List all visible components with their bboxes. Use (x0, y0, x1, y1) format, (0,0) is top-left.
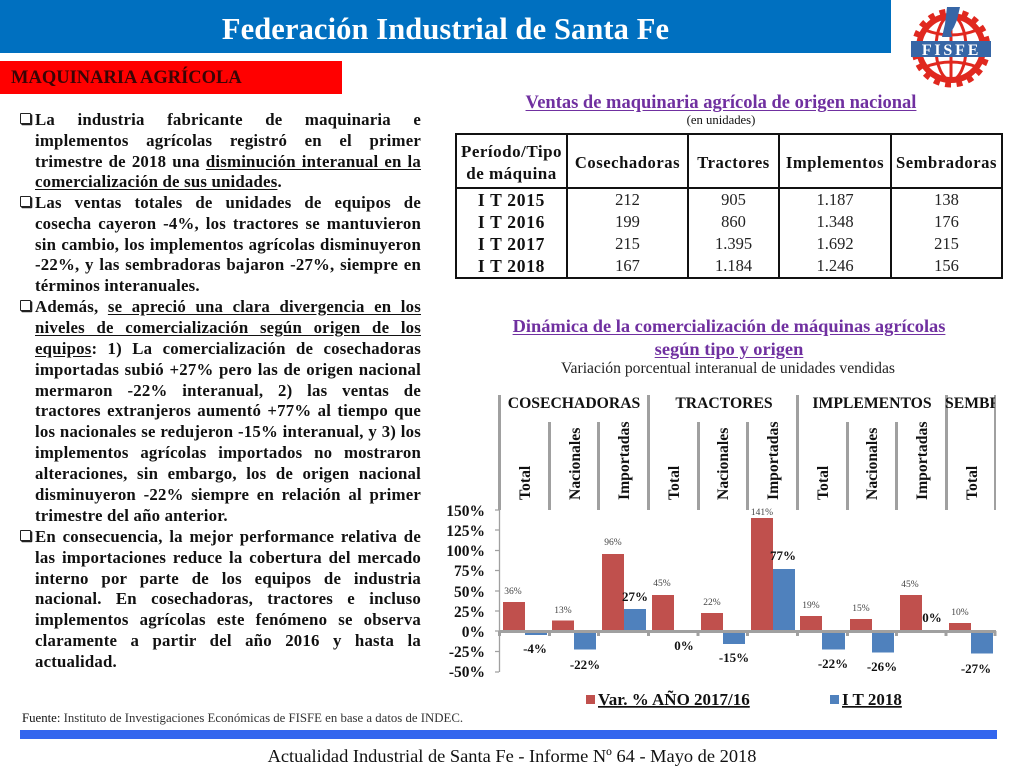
table: sales by period (455, 133, 1003, 279)
sub-category labels: Total (964, 465, 981, 500)
bar chart (446, 395, 1010, 709)
legend: Var. % AÑO 2017/16 (598, 690, 750, 709)
table: sales by period: 215 (615, 234, 640, 253)
text block: analysis bullets: Las ventas totales de unidades de equipos de (35, 193, 421, 212)
data labels: 2017/16: 36% (504, 587, 522, 597)
baseline (499, 630, 996, 633)
text block: analysis bullets: implementos agrícolas registró en el primer (35, 131, 421, 150)
table: sales by period: 215 (934, 234, 959, 253)
bars: I T 2018 (525, 569, 993, 654)
table: sales by period: 156 (934, 256, 959, 275)
sub-category labels: Nacionales (567, 428, 584, 500)
table: sales by period: 1.692 (816, 234, 854, 253)
text block: analysis bullets: implementos agrícolas este fenómeno se observa (35, 610, 421, 629)
icon: FISFE logo (911, 7, 991, 88)
table: sales by period: Implementos (786, 153, 884, 172)
table: sales by period: 199 (615, 212, 640, 231)
text block: analysis bullets: equipos: 1) La comercialización de cosechadoras (35, 339, 421, 358)
legend (586, 690, 902, 709)
table: sales by period: Tractores (697, 153, 770, 172)
category labels: COSECHADORAS (508, 395, 641, 412)
data labels: 2017/16: 45% (901, 580, 919, 590)
sub-category labels: Importadas (914, 422, 931, 500)
table: sales by period: 212 (615, 190, 640, 209)
table: sales by period: Sembradoras (896, 153, 997, 172)
y axis: 150% (446, 503, 485, 520)
sub-category labels: Total (815, 465, 832, 500)
text block: analysis bullets: -22%, y las sembradoras bajaron -27%, siempre en (35, 255, 421, 274)
data labels: 2017/16: 15% (852, 604, 870, 614)
sub-category labels: Importadas (765, 422, 782, 500)
text block: analysis bullets: importadas subió +27% pero las de origen nacional (35, 360, 421, 379)
table: sales by period: 1.348 (816, 212, 854, 231)
table: sales by period: 905 (721, 190, 746, 209)
text block: analysis bullets: implementos agrícolas importados no mostraron (35, 443, 421, 462)
data labels: I T 2018: -22% (818, 656, 848, 671)
text block: analysis bullets: interno por parte de los equipos de industria (35, 569, 421, 588)
data labels: 2017/16: 141% (751, 508, 773, 518)
text block: analysis bullets: actualidad. (35, 652, 117, 671)
y axis: 125% (446, 523, 485, 540)
text block: analysis bullets: alteraciones, sin embargo, los de origen nacional (35, 464, 421, 483)
data labels: I T 2018: 77% (770, 548, 796, 563)
footer text: Actualidad Industrial de Santa Fe - Informe Nº 64 - Mayo de 2018 (268, 746, 756, 766)
y axis: -50% (449, 664, 485, 681)
table subtitle: (en unidades) (687, 113, 755, 127)
category dividers (498, 395, 996, 510)
y axis (446, 503, 500, 681)
text block: analysis bullets: tractores extranjeros aumentó +77% al tiempo que (35, 401, 421, 420)
data labels: 2017/16: 96% (604, 538, 622, 548)
data labels: 2017/16: 45% (653, 579, 671, 589)
footer bar (20, 730, 997, 739)
data labels: 2017/16: 22% (703, 598, 721, 608)
category labels (508, 395, 1024, 412)
table: sales by period: Período/Tipo (461, 142, 562, 161)
text block: analysis bullets (20, 110, 421, 671)
chart subtitle: Variación porcentual interanual de unidades vendidas (561, 360, 895, 377)
y axis: -25% (449, 644, 485, 661)
data labels: I T 2018: -22% (570, 657, 600, 672)
section heading: Maquinaria agrícola: MAQUINARIA AGRÍCOLA (11, 68, 242, 88)
table heading: Ventas de maquinaria agrícola de origen nacional (526, 93, 916, 113)
text block: analysis bullets: nacional. En cosechadoras, tractores e incluso (35, 589, 421, 608)
data labels: I T 2018: -4% (523, 641, 547, 656)
sub-category labels: Nacionales (864, 428, 881, 500)
table: sales by period: de máquina (466, 164, 557, 183)
table: sales by period: 1.187 (816, 190, 854, 209)
data labels: I T 2018 (523, 548, 991, 676)
bars: Var. % año 2017/16 (503, 518, 971, 631)
text block: analysis bullets: trimestre de 2018 una disminución interanual en la (35, 152, 421, 171)
title: Federación Industrial de Santa Fe (222, 12, 669, 46)
data labels: 2017/16: 13% (554, 606, 572, 616)
text block: analysis bullets: los nacionales se redujeron -15% interanual, y 3) los (35, 422, 421, 441)
table: sales by period: Cosechadoras (575, 153, 680, 172)
text block: analysis bullets: mermaron -22% interanual, 2) las ventas de (35, 381, 421, 400)
table: sales by period: I T 2015 (478, 190, 545, 210)
header banner (0, 0, 891, 53)
data labels: 2017/16: 10% (951, 608, 969, 618)
table: sales by period: I T 2016 (478, 212, 545, 232)
category labels: IMPLEMENTOS (812, 395, 932, 412)
data labels: 2017/16: 19% (802, 601, 820, 611)
source note: Fuente: Instituto de Investigaciones Económicas de FISFE en base a datos de INDEC. (22, 711, 463, 725)
text block: analysis bullets: las importaciones reduce la cobertura del mercado (35, 548, 421, 567)
y axis: 100% (446, 543, 485, 560)
data labels: 2017/16 (504, 508, 969, 618)
data labels: I T 2018: -26% (867, 659, 897, 674)
table: sales by period: 1.395 (715, 234, 752, 253)
text block: analysis bullets: niveles de comercialización según origen de los (35, 318, 421, 337)
table: sales by period: 138 (934, 190, 959, 209)
text block: analysis bullets: sin cambio, los implementos agrícolas disminuyeron (35, 235, 421, 254)
sub-category labels: Total (666, 465, 683, 500)
text block: analysis bullets: Además, se apreció una clara divergencia en los (35, 297, 421, 316)
data labels: I T 2018: -27% (961, 661, 991, 676)
text block: analysis bullets: La industria fabricante de maquinaria e (35, 110, 421, 129)
data labels: I T 2018: -15% (719, 650, 749, 665)
icon: FISFE logo: FISFE (922, 42, 981, 59)
text block: analysis bullets: trimestre del año anterior. (35, 506, 228, 525)
table: sales by period: I T 2018 (478, 256, 545, 276)
text block: analysis bullets: disminuyeron -22% siempre en relación al primer (35, 485, 421, 504)
data labels: I T 2018: 0% (922, 610, 942, 625)
text block: analysis bullets: cosecha cayeron -4%, los tractores se mantuvieron (35, 214, 421, 233)
y axis: 25% (454, 604, 485, 621)
data labels: I T 2018: 27% (622, 589, 648, 604)
table: sales by period: 176 (934, 212, 959, 231)
table: sales by period: 1.246 (816, 256, 854, 275)
chart heading: Dinámica de la comercialización de máquinas agrícolas (513, 316, 945, 336)
text block: analysis bullets: comercialización de sus unidades. (35, 172, 282, 191)
section heading: Maquinaria agrícola (0, 61, 342, 94)
data labels: I T 2018: 0% (674, 638, 694, 653)
sub-category labels: Total (517, 465, 534, 500)
text block: analysis bullets: En consecuencia, la mejor performance relativa de (35, 527, 421, 546)
y axis: 50% (454, 584, 485, 601)
text block: analysis bullets: términos interanuales. (35, 276, 200, 295)
table: sales by period: I T 2017 (478, 234, 545, 254)
table: sales by period: 1.184 (715, 256, 752, 275)
legend: I T 2018 (842, 690, 902, 709)
text block: analysis bullets: claramente a partir del año 2016 y hasta la (35, 631, 421, 650)
sub-category labels: Nacionales (715, 428, 732, 500)
sub-category labels (517, 422, 981, 500)
y axis: 0% (462, 624, 485, 641)
table: sales by period: 167 (615, 256, 640, 275)
table: sales by period: 860 (721, 212, 746, 231)
category labels: TRACTORES (675, 395, 773, 412)
chart heading: según tipo y origen (655, 339, 803, 359)
y axis: 75% (454, 563, 485, 580)
sub-category labels: Importadas (616, 422, 633, 500)
chart heading (512, 316, 946, 359)
